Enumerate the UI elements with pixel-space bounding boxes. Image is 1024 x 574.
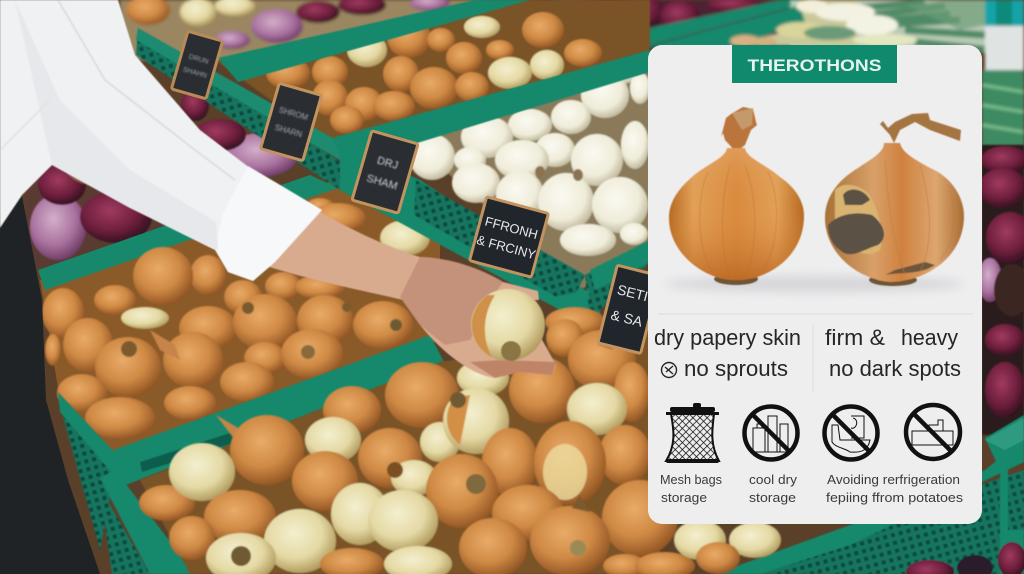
quality criteria text: dry papery skin <box>654 325 801 350</box>
crate rims <box>58 0 650 574</box>
white onion crate <box>409 60 650 290</box>
quality criteria text: firm & <box>825 325 885 350</box>
panel: onion comparison card <box>648 45 982 524</box>
icon: mesh bag <box>666 403 719 463</box>
held onion <box>471 289 545 361</box>
sign 4 <box>470 197 548 277</box>
storage tip labels: cool dry <box>749 472 798 487</box>
left purple onions <box>25 89 298 270</box>
price and produce signs <box>171 31 660 353</box>
bad onion with dark spots <box>825 113 964 286</box>
sign 4: & FRCINY <box>475 232 538 262</box>
quality criteria text: no dark spots <box>829 356 961 381</box>
person: arm and hand <box>263 210 556 378</box>
floor shadow <box>665 276 965 292</box>
storage tip labels: Avoiding rerfrigeration <box>827 472 960 487</box>
sign 2 <box>260 83 322 161</box>
sign 1: SHAHN <box>182 66 207 80</box>
sign 2: SHROM <box>278 105 309 122</box>
quality criteria text: heavy <box>901 325 959 350</box>
divider <box>658 313 973 315</box>
quality criteria text: no sprouts <box>684 356 788 381</box>
person: apron <box>0 196 100 574</box>
icon: keeping from potatoes <box>906 405 960 459</box>
sign 3 <box>352 131 418 213</box>
sign 2: SHARN <box>274 123 303 139</box>
sign 4: FFRONH <box>483 214 540 242</box>
good onion <box>669 107 804 285</box>
sign 1: DRUN <box>188 54 209 66</box>
front onion crate <box>139 307 781 574</box>
quality criteria text <box>654 325 961 381</box>
sign 5 <box>598 265 660 353</box>
sign 3: SHAM <box>365 172 399 193</box>
icon: no sprouts mark <box>662 362 676 378</box>
title banner <box>732 45 897 83</box>
person: white shirt <box>0 0 322 281</box>
spring onions and right edge <box>640 0 1024 146</box>
lower right crate <box>715 415 1024 574</box>
sign 1 <box>171 31 223 99</box>
storage tip labels: Mesh bags <box>660 472 722 487</box>
middle golden onion crate <box>38 175 440 470</box>
top crate with mixed onions <box>120 0 480 60</box>
icon: avoiding refrigeration <box>824 406 878 460</box>
icon: cool dry storage <box>744 406 798 460</box>
title banner: THEROTHONS <box>748 56 882 75</box>
storage tip labels: storage <box>661 490 707 505</box>
sign 5: SETI <box>616 281 650 304</box>
sign 5: & SA <box>609 306 645 330</box>
golden onion crate <box>218 0 650 150</box>
top right crate <box>540 0 800 50</box>
storage tip labels: fepiing ffrom potatoes <box>826 490 964 505</box>
storage tip labels <box>660 472 964 505</box>
right purple onions <box>978 145 1024 435</box>
storage tip labels: storage <box>749 490 796 505</box>
sign 3: DRJ <box>376 155 399 172</box>
